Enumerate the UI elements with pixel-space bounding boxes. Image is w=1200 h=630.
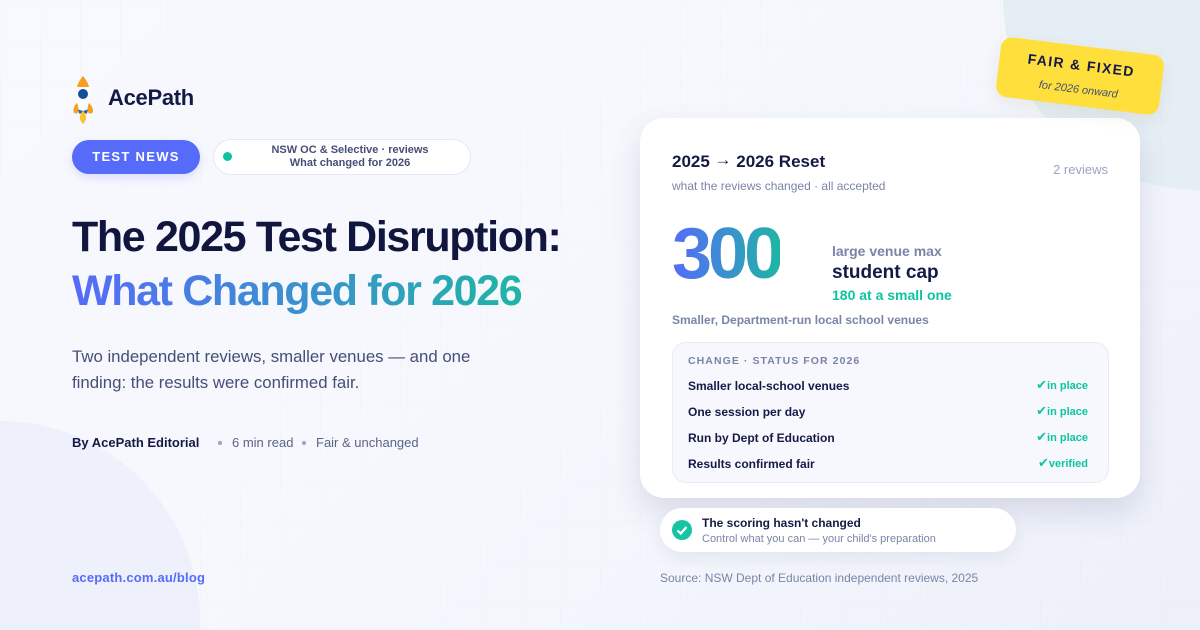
row 3: Run by Dept of Education	[688, 431, 835, 445]
row 2: ✔in place	[1036, 404, 1088, 419]
title: What Changed for 2026	[72, 267, 521, 315]
subtitle: finding: the results were confirmed fair.	[72, 373, 359, 392]
row 4: Results confirmed fair	[688, 457, 815, 471]
stat labels	[832, 243, 952, 303]
footer link: acepath.com.au/blog	[72, 570, 205, 585]
byline: 6 min read	[232, 435, 293, 450]
source: Source: NSW Dept of Education independent reviews, 2025	[660, 571, 978, 585]
callout title: The scoring hasn't changed	[702, 516, 861, 530]
pill: topic	[213, 139, 471, 175]
row 2	[688, 404, 1088, 419]
big number: 300	[672, 214, 780, 294]
byline: By AcePath Editorial	[72, 435, 199, 450]
stat note: Smaller, Department-run local school venues	[672, 313, 929, 327]
status table	[672, 342, 1109, 483]
callout text: Control what you can — your child's preparation	[702, 533, 936, 545]
stat labels: large venue max	[832, 243, 942, 259]
subtitle: Two independent reviews, smaller venues — and one	[72, 347, 470, 366]
table header: CHANGE · STATUS FOR 2026	[688, 355, 860, 367]
pill text	[271, 144, 429, 169]
sticker: fair and fixed	[995, 36, 1165, 116]
brand name: AcePath	[108, 85, 194, 110]
row 1: ✔in place	[1036, 378, 1088, 393]
row 3: ✔in place	[1036, 430, 1088, 445]
pill text: What changed for 2026	[290, 157, 410, 169]
row 2: One session per day	[688, 405, 805, 419]
row 4: ✔verified	[1038, 456, 1088, 471]
row 1: Smaller local-school venues	[688, 379, 849, 393]
stat labels: 180 at a small one	[832, 287, 952, 303]
background blob: top right	[1003, 0, 1200, 190]
badge: test news	[72, 140, 200, 174]
icon: check circle	[672, 520, 692, 540]
callout: scoring	[660, 508, 1016, 552]
card subheading: what the reviews changed · all accepted	[672, 179, 885, 193]
background blob: bottom left	[0, 421, 200, 630]
subtitle	[72, 347, 470, 392]
reviews count: 2 reviews	[1053, 162, 1108, 177]
card heading: 2025 → 2026 Reset	[672, 150, 825, 171]
sticker: fair and fixed: for 2026 onward	[1038, 79, 1118, 101]
badge: test news: TEST NEWS	[92, 149, 180, 164]
logo	[73, 76, 194, 124]
title: The 2025 Test Disruption:	[72, 213, 560, 261]
row 1	[688, 378, 1088, 393]
card	[640, 118, 1140, 498]
stat labels: student cap	[832, 262, 939, 283]
row 4	[688, 456, 1088, 471]
byline	[72, 435, 419, 450]
pill text: NSW OC & Selective · reviews	[271, 144, 429, 156]
title	[72, 213, 560, 315]
byline: Fair & unchanged	[316, 435, 419, 450]
sticker: fair and fixed: FAIR & FIXED	[1027, 51, 1136, 80]
status dot	[223, 152, 232, 161]
icon: rocket	[73, 76, 94, 124]
row 3	[688, 430, 1088, 445]
